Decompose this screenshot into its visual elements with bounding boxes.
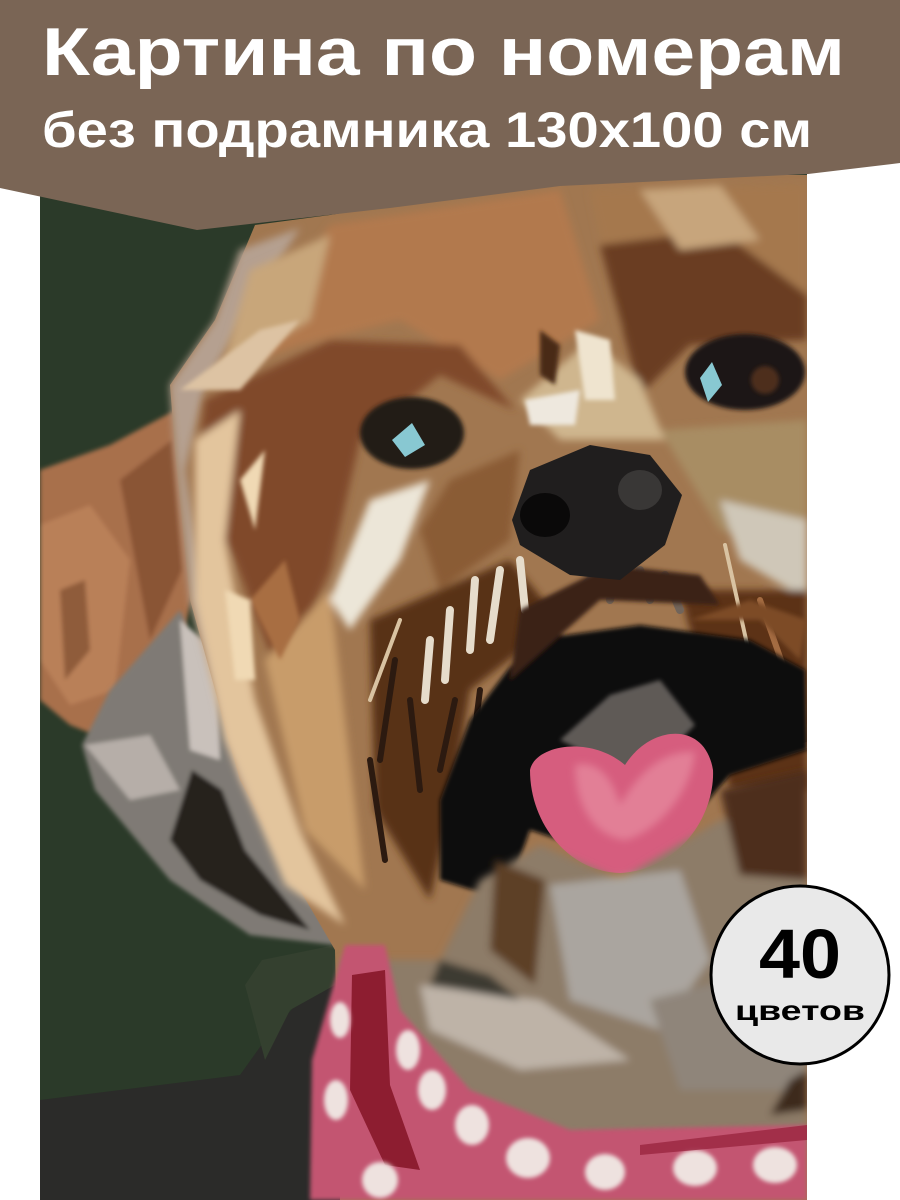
- painting background: [40, 170, 807, 1200]
- top banner: [0, 0, 900, 230]
- dog head fur: [170, 175, 810, 1200]
- left eye: [360, 397, 464, 469]
- badge number: 40: [759, 915, 841, 993]
- dog chin and neck: [389, 768, 807, 1131]
- dog ear: [40, 405, 200, 745]
- dog tongue: [530, 680, 713, 873]
- badge label: цветов: [735, 995, 865, 1026]
- fur halo: [164, 226, 300, 810]
- fur strands: [370, 545, 807, 890]
- badge: 40 colours: [711, 886, 889, 1064]
- title: Картина по номерам: [42, 14, 845, 90]
- subtitle: без подрамника 130х100 см: [42, 102, 812, 158]
- pink bandana: [310, 945, 807, 1200]
- dog grey ruff: [82, 610, 335, 945]
- bandana dots: [324, 1002, 797, 1198]
- right eye: [685, 334, 805, 410]
- painting of a dog: [40, 170, 810, 1200]
- dog nose: [512, 445, 682, 580]
- open mouth: [440, 565, 807, 900]
